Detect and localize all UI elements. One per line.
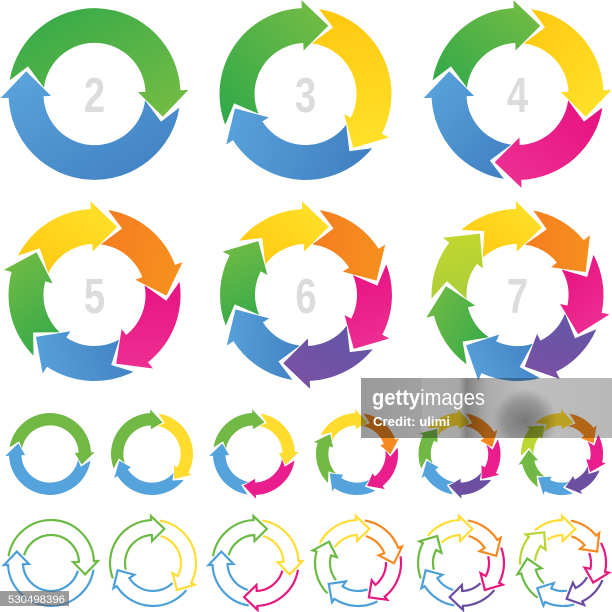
arrow: green bbox=[220, 0, 328, 125]
arrow: blue bbox=[424, 71, 511, 179]
arrow: purple bbox=[283, 326, 373, 389]
number 5: 5 bbox=[84, 270, 105, 324]
number 2: 2 bbox=[84, 69, 105, 123]
arrow: orange bbox=[512, 192, 606, 291]
arrow: orange bbox=[91, 193, 191, 310]
cycle diagram: 4 arrows bbox=[424, 0, 611, 188]
arrow: blue bbox=[213, 59, 375, 215]
outline cycle: 4 arrows bbox=[209, 516, 302, 610]
cycle diagram: 3 arrows bbox=[213, 0, 430, 215]
outline cycle: 5 arrows bbox=[302, 512, 417, 612]
number 7: 7 bbox=[507, 270, 528, 324]
cycle diagram: 6 arrows bbox=[191, 190, 421, 400]
arrow: orange bbox=[299, 190, 399, 299]
outline cycle: 2 arrows bbox=[4, 520, 98, 606]
number 3: 3 bbox=[295, 69, 316, 123]
arrow: blue bbox=[213, 291, 313, 400]
arrow: pink bbox=[547, 248, 612, 340]
arrow: yellow bbox=[239, 201, 329, 264]
watermark panel bbox=[361, 378, 612, 438]
image id tag bbox=[0, 591, 69, 606]
arrow: yellow bbox=[524, 9, 611, 117]
outline cycle: 3 arrows bbox=[107, 516, 215, 612]
cycle diagram: 7 arrows bbox=[408, 192, 612, 405]
arrow: yellow bbox=[268, 4, 430, 161]
outline cycle: 7 arrows bbox=[508, 512, 612, 612]
watermark credit: Credit: ulimi bbox=[373, 415, 450, 429]
small filled cycle: 3 arrows bbox=[108, 409, 211, 512]
arrow: blue bbox=[1, 71, 179, 180]
arrow: yellow bbox=[461, 200, 543, 259]
small filled cycle: 4 arrows bbox=[209, 409, 299, 499]
cycle diagram: 2 arrows bbox=[1, 8, 188, 180]
cycle diagram: 5 arrows bbox=[0, 193, 212, 416]
arrow: green bbox=[10, 8, 188, 117]
arrow: yellow bbox=[18, 201, 117, 273]
small filled cycle: 6 arrows bbox=[405, 404, 514, 504]
arrow: purple bbox=[512, 304, 609, 390]
arrow: pink bbox=[89, 267, 212, 384]
number 6: 6 bbox=[295, 270, 317, 324]
arrow: green bbox=[0, 244, 81, 361]
arrow: green bbox=[433, 0, 540, 88]
arrow: blue bbox=[21, 299, 144, 416]
image id tag: 530498396 bbox=[8, 594, 65, 606]
arrow: green bbox=[421, 280, 493, 370]
small filled cycle: 5 arrows bbox=[303, 405, 413, 512]
number 4: 4 bbox=[507, 69, 529, 123]
outline cycle: 6 arrows bbox=[404, 511, 518, 612]
arrow: pink bbox=[321, 253, 421, 362]
arrow: lime bbox=[408, 217, 504, 316]
arrow: green bbox=[191, 228, 291, 337]
small filled cycle: 7 arrows bbox=[510, 405, 612, 506]
small filled cycle: 2 arrows bbox=[5, 413, 95, 495]
watermark logo: gettyimages bbox=[372, 385, 485, 410]
arrow: blue bbox=[454, 317, 552, 405]
arrow: pink bbox=[495, 100, 602, 188]
